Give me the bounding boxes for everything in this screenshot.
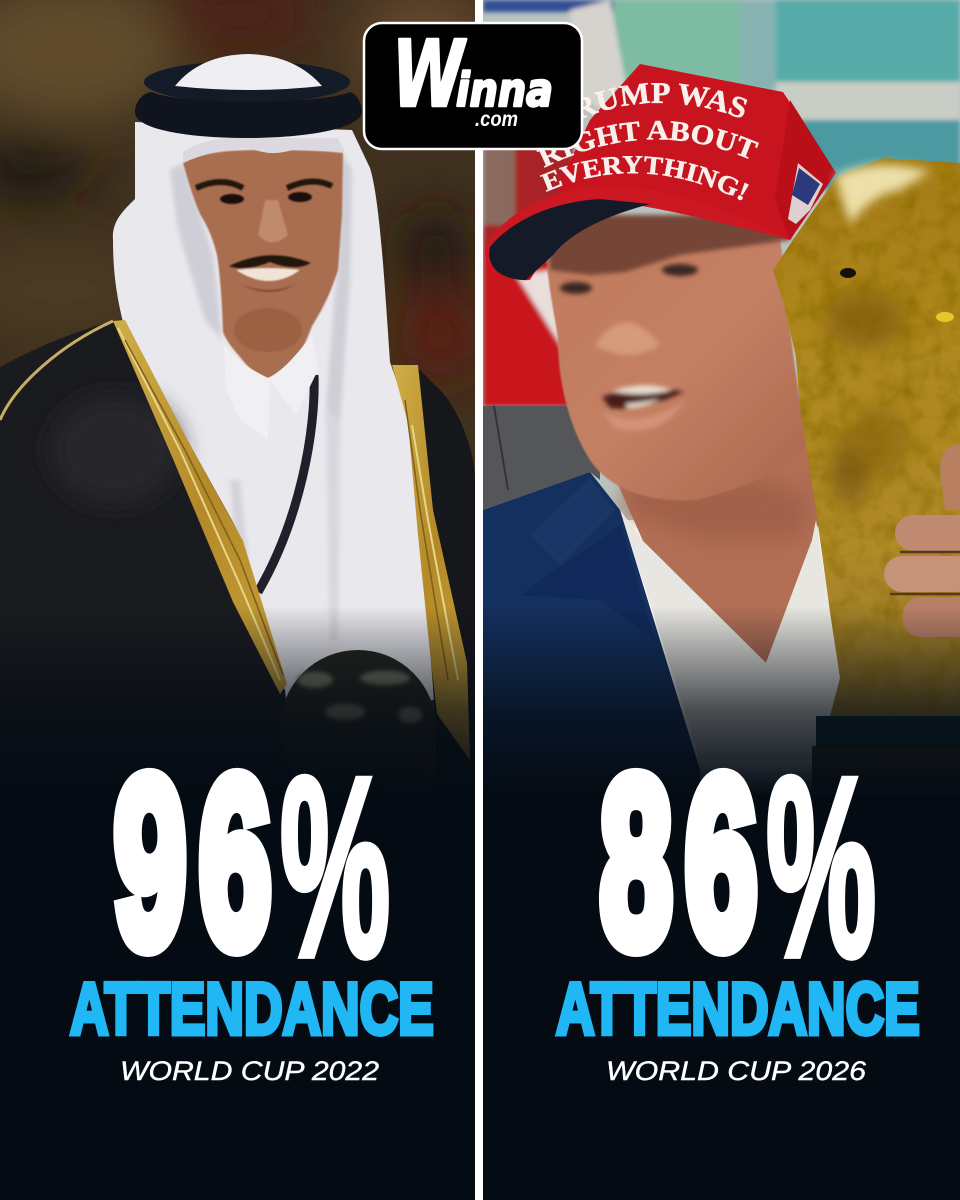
dark globe of trophy	[286, 650, 433, 723]
left photo: Qatar emir	[0, 0, 495, 1200]
neck	[616, 440, 820, 663]
blurred stadium backdrop	[0, 0, 495, 820]
red cap	[485, 64, 836, 280]
lanyard	[258, 375, 314, 592]
cap slogan: EVERYTHING!	[540, 156, 749, 200]
trophy base	[812, 716, 960, 792]
cap slogan	[536, 82, 759, 200]
grey chair	[483, 406, 600, 510]
gold robe trim left	[113, 320, 287, 694]
bottom fade	[483, 606, 960, 796]
86% stat: %	[766, 725, 876, 1010]
shirt collar	[243, 341, 316, 388]
ATTENDANCE label left: ATTENDANCE	[70, 968, 434, 1050]
cap and black agal ring	[135, 54, 362, 163]
cap slogan: TRUMP WAS	[583, 82, 748, 118]
navy suit	[483, 472, 700, 786]
World Cup 2022 caption: WORLD CUP 2022	[120, 1056, 379, 1086]
facial features	[196, 181, 332, 352]
96% stat: 9	[114, 727, 186, 996]
logo wordmark: inna	[456, 63, 553, 117]
cap slogan: RIGHT ABOUT	[536, 120, 759, 168]
gold robe trim right	[392, 365, 470, 760]
window backdrop and flag	[483, 0, 960, 520]
logo wordmark: W	[392, 21, 467, 128]
86% stat: 6	[685, 727, 757, 996]
face	[183, 150, 343, 378]
black robe left sleeve	[0, 322, 286, 736]
96% stat: %	[280, 725, 390, 1010]
facial features	[548, 215, 790, 431]
cap flag patch	[788, 163, 823, 224]
ATTENDANCE label right: ATTENDANCE	[556, 968, 920, 1050]
robe sheen	[50, 395, 180, 505]
Winna logo badge	[364, 21, 582, 149]
white shirt	[620, 510, 840, 722]
right photo: Trump with trophy	[483, 0, 960, 1200]
ghutra fold shadows	[170, 150, 352, 640]
robe shoulder gold edge	[0, 321, 113, 420]
black robe right side	[418, 368, 475, 741]
white ghutra and thobe	[113, 122, 434, 700]
logo .com: .com	[475, 108, 518, 131]
face	[546, 240, 810, 500]
hand on trophy	[884, 444, 960, 637]
gold trophy	[773, 158, 960, 716]
bottom fade	[0, 606, 475, 796]
96% stat: 6	[199, 727, 271, 996]
86% stat	[600, 725, 876, 1010]
logo wordmark	[392, 21, 553, 128]
World Cup 2026 caption: WORLD CUP 2026	[606, 1056, 867, 1086]
86% stat: 8	[600, 727, 672, 996]
96% stat	[114, 725, 390, 1010]
